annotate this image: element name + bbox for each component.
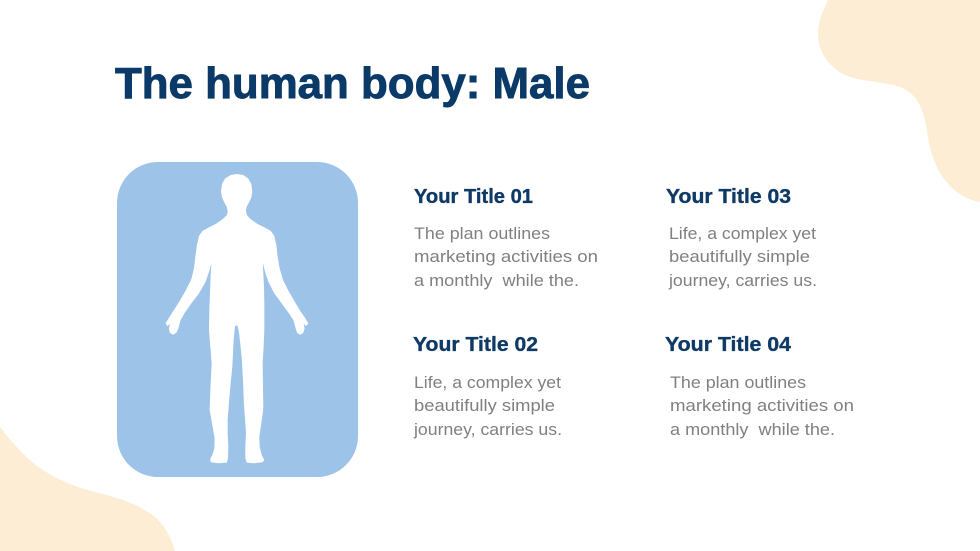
body 04: The plan outlines [670, 373, 806, 392]
icon: male body silhouette [166, 174, 308, 463]
body 03: Life, a complex yet [669, 224, 816, 243]
body 03: journey, carries us. [668, 271, 817, 290]
text block: title 04 [665, 334, 854, 439]
heading 03: Your Title 03 [666, 186, 791, 208]
body 04 [670, 373, 854, 439]
body 01: The plan outlines [414, 224, 550, 243]
heading 01: Your Title 01 [414, 186, 533, 208]
decorative blob: top right [818, 0, 980, 202]
panel background [117, 162, 358, 477]
heading 04: Your Title 04 [665, 334, 792, 356]
body 04: a monthly while the. [670, 420, 835, 439]
body 01: marketing activities on [414, 247, 598, 266]
text block: title 01 [414, 186, 598, 290]
decorative blob: bottom left [0, 427, 175, 551]
body 02 [413, 373, 562, 439]
body 02: journey, carries us. [413, 420, 562, 439]
body 03 [668, 224, 817, 290]
text block: title 03 [666, 186, 817, 290]
body 01 [414, 224, 598, 290]
body 02: beautifully simple [414, 396, 555, 415]
body 02: Life, a complex yet [414, 373, 561, 392]
body 03: beautifully simple [669, 247, 810, 266]
text block: title 02 [413, 334, 562, 439]
panel: body figure [117, 162, 358, 477]
body 04: marketing activities on [670, 396, 854, 415]
heading 02: Your Title 02 [413, 334, 538, 356]
body 01: a monthly while the. [414, 271, 579, 290]
title: The human body: Male [115, 59, 590, 108]
